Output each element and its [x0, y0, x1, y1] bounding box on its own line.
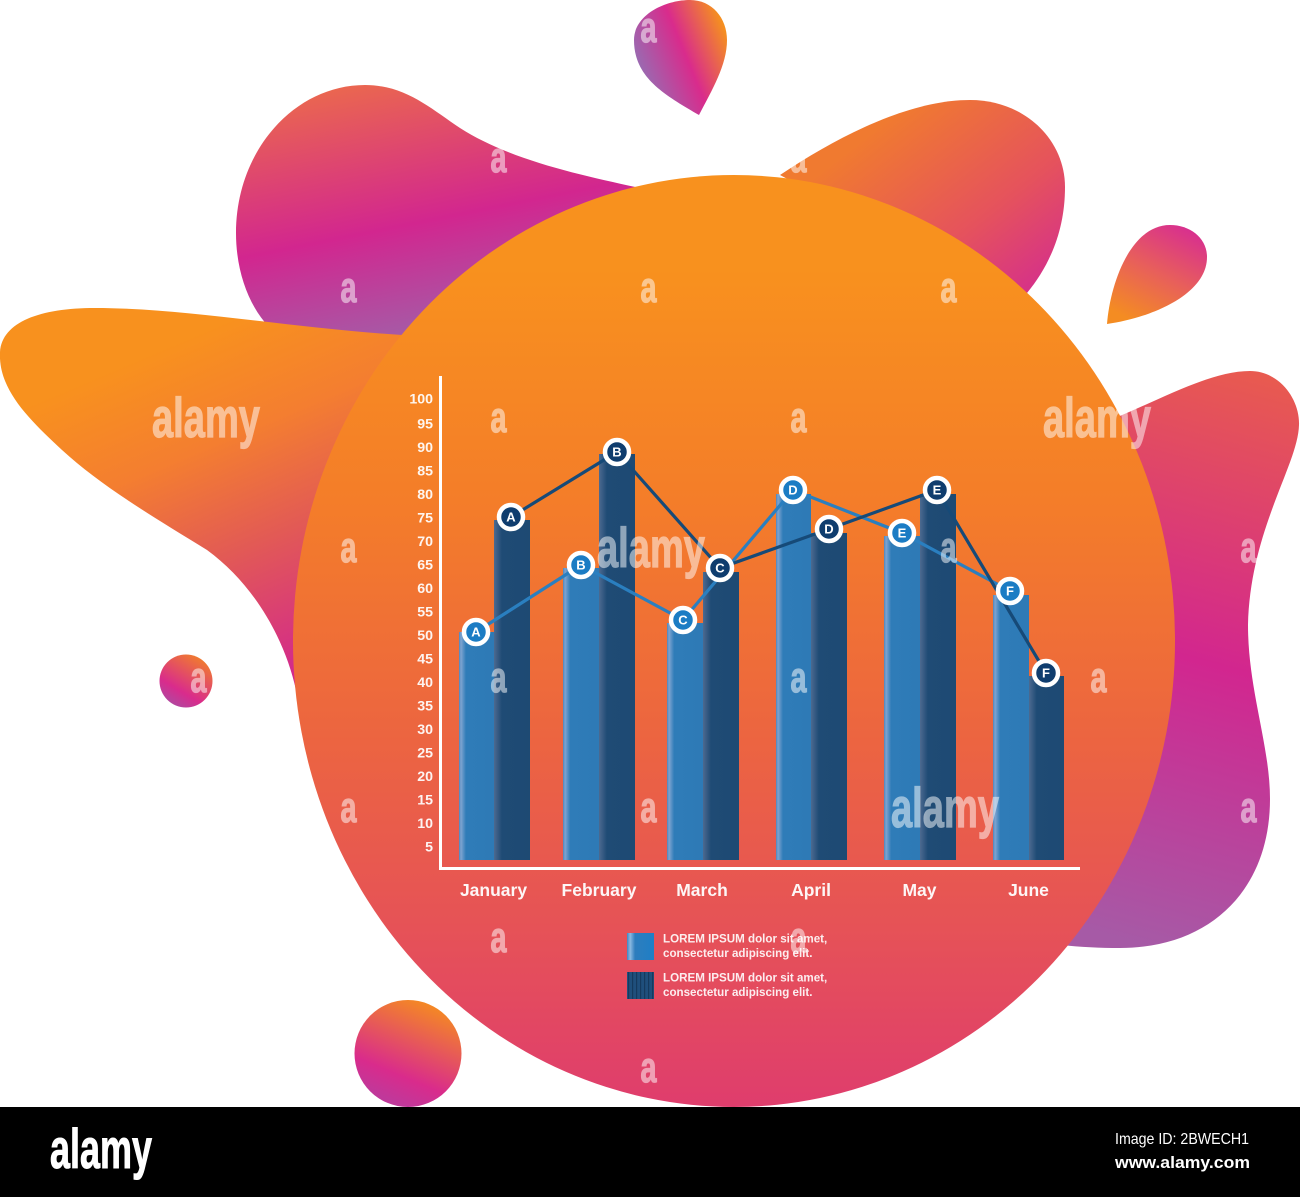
y axis labels: 70	[417, 534, 433, 550]
y axis labels	[409, 392, 433, 856]
y axis labels: 35	[417, 698, 433, 714]
y axis labels: 95	[417, 416, 433, 432]
markers: series 1: E	[898, 526, 907, 540]
small ball: left	[160, 654, 212, 708]
markers: series 2: B	[612, 444, 622, 460]
markers: series 1: A	[471, 624, 481, 640]
y axis labels: 25	[417, 746, 433, 762]
footer url: www.alamy.com	[1114, 1153, 1250, 1172]
watermarks: a	[640, 1044, 657, 1092]
watermarks: a	[790, 914, 807, 962]
x axis labels: May	[902, 880, 937, 900]
markers: series 1: F	[1006, 584, 1014, 598]
watermarks: a	[940, 264, 957, 312]
watermarks: a	[640, 784, 657, 832]
markers: series 2: A	[506, 510, 516, 524]
x axis labels: April	[791, 880, 831, 900]
bars: January	[459, 520, 530, 860]
markers: series 2: E	[933, 482, 942, 498]
legend text: light blue: consectetur adipiscing elit.	[663, 947, 812, 960]
bars: April	[776, 494, 847, 860]
y axis labels: 55	[417, 604, 433, 620]
watermarks: a	[490, 394, 507, 442]
y axis labels: 45	[417, 652, 433, 668]
y axis labels: 5	[425, 840, 433, 856]
y axis labels: 30	[417, 722, 433, 738]
watermarks: a	[490, 134, 507, 182]
markers: series 1: C	[678, 612, 688, 628]
y axis labels: 50	[417, 628, 433, 644]
bars: March	[667, 572, 739, 860]
y axis labels: 20	[417, 769, 433, 785]
watermarks: alamy	[597, 516, 705, 579]
markers: series 1: B	[576, 558, 586, 572]
watermarks: alamy	[152, 386, 260, 449]
legend	[627, 932, 827, 999]
line: series 2	[511, 452, 1046, 673]
bars: June	[993, 595, 1064, 860]
y axis labels: 90	[417, 440, 433, 456]
line: series 1	[476, 490, 1010, 632]
footer logo: alamy	[50, 1117, 152, 1180]
watermarks: a	[790, 394, 807, 442]
x axis labels	[460, 880, 1049, 900]
markers: series 1	[464, 478, 1022, 644]
markers: series 2: F	[1042, 666, 1050, 680]
markers: series 2: C	[715, 560, 725, 576]
watermarks: a	[640, 264, 657, 312]
markers: series 1: D	[788, 482, 798, 498]
y axis labels: 40	[417, 675, 433, 691]
y axis labels: 15	[417, 792, 433, 808]
watermarks: a	[490, 654, 507, 702]
watermarks: a	[1090, 654, 1107, 702]
y axis labels: 65	[417, 558, 433, 574]
watermarks: a	[790, 654, 807, 702]
x axis labels: June	[1008, 880, 1049, 900]
watermarks	[152, 4, 1257, 1092]
footer image id: Image ID: 2BWECH1	[1115, 1131, 1249, 1148]
watermarks: a	[790, 134, 807, 182]
watermarks: alamy	[1043, 386, 1151, 449]
y axis labels: 85	[417, 464, 433, 480]
watermarks: a	[340, 784, 357, 832]
legend text: dark blue: consectetur adipiscing elit.	[663, 986, 812, 999]
footer bar	[0, 1107, 1300, 1197]
blob: left orange	[0, 308, 420, 760]
watermarks: a	[340, 264, 357, 312]
markers: series 2: D	[824, 522, 834, 536]
y axis labels: 80	[417, 487, 433, 503]
legend text: light blue: LOREM IPSUM dolor sit amet,	[663, 932, 827, 946]
y axis labels: 10	[417, 816, 433, 832]
chart axes	[440, 376, 1080, 868]
bar chart	[459, 454, 1064, 860]
watermarks: a	[1240, 524, 1257, 572]
droplet: right	[1107, 225, 1207, 324]
watermarks: a	[1240, 784, 1257, 832]
y axis labels: 60	[417, 581, 433, 597]
blob: top left magenta	[236, 85, 640, 345]
legend text: dark blue: LOREM IPSUM dolor sit amet,	[663, 972, 827, 984]
watermarks: a	[940, 524, 957, 572]
legend swatch: dark blue	[627, 972, 654, 999]
watermarks: a	[190, 654, 207, 702]
legend swatch: light blue	[627, 933, 654, 960]
blob: top right orange	[780, 100, 1065, 293]
bars: May	[884, 494, 956, 860]
main circle	[293, 175, 1175, 1107]
watermarks: a	[340, 524, 357, 572]
bars: February	[563, 454, 635, 860]
y axis labels: 75	[417, 510, 433, 526]
y axis labels: 100	[409, 392, 433, 408]
x axis labels: March	[676, 880, 728, 900]
blob: right magenta	[1050, 371, 1299, 948]
ball: bottom	[354, 1000, 462, 1107]
watermarks: alamy	[891, 776, 999, 839]
x axis labels: February	[562, 880, 637, 900]
x axis labels: January	[460, 880, 527, 900]
markers: series 2	[499, 440, 1058, 685]
droplet: top	[634, 0, 727, 115]
watermarks: a	[640, 4, 657, 52]
watermarks: a	[490, 914, 507, 962]
